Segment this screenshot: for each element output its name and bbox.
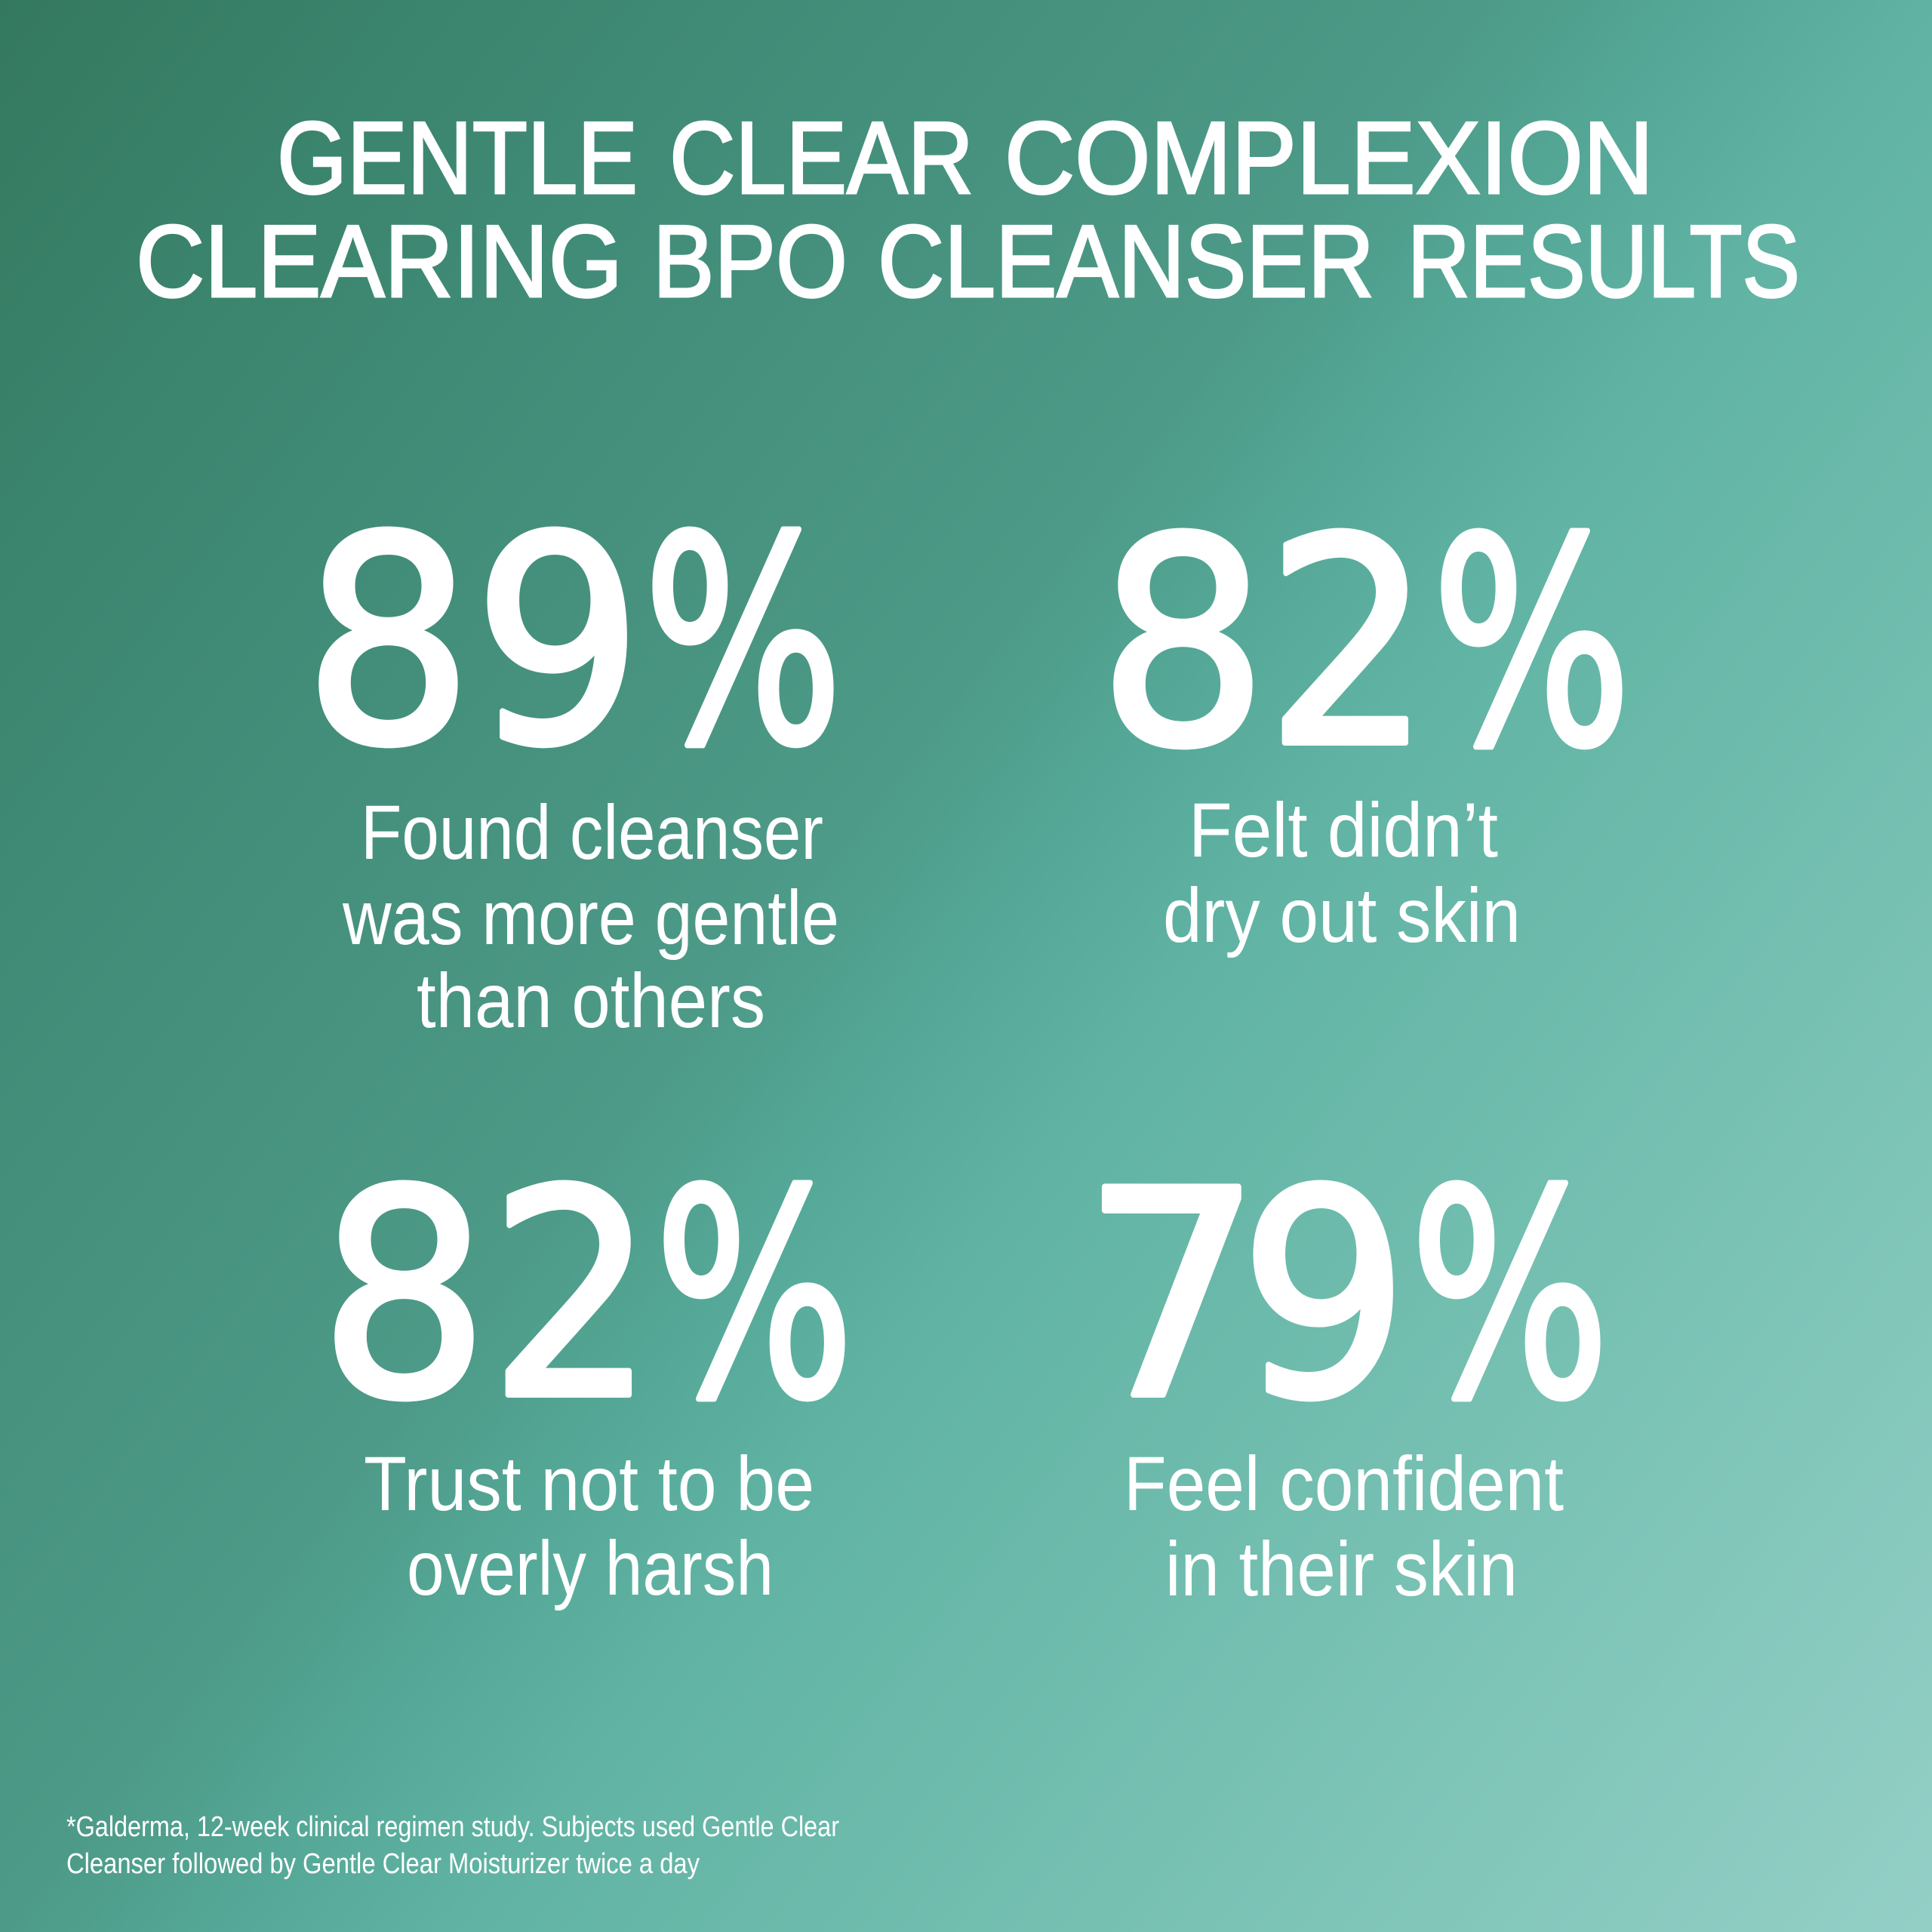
description: feel confident in their skin: Feel confident	[1124, 1441, 1564, 1527]
panel: stat 79%	[1081, 1131, 1610, 1612]
number: 82%: %	[1432, 478, 1632, 811]
number: 79%: 9	[1239, 1131, 1409, 1463]
number: 82%: 8	[1098, 478, 1268, 811]
footnote	[66, 1811, 839, 1880]
title: COMPLEXION	[1004, 100, 1654, 215]
footnote: Cleanser followed by Gentle Clear Moisturizer twice a day	[66, 1848, 700, 1880]
panel: stat 89%	[303, 477, 843, 1044]
panel: stat 82% not overly harsh	[319, 1131, 854, 1611]
description: trust not to be overly harsh	[364, 1441, 814, 1611]
number: 82%: 8	[319, 1131, 489, 1463]
description: feel confident in their skin: in their skin	[1165, 1526, 1518, 1612]
title: CLEARING	[136, 204, 623, 318]
number: 79%: 7	[1081, 1131, 1263, 1463]
number: 89%: 9	[473, 477, 643, 809]
number: 82%: %	[654, 1131, 854, 1463]
description: felt didn't dry out skin: Felt didn’t	[1189, 787, 1498, 873]
title: GENTLE	[277, 100, 638, 215]
description: feel confident in their skin	[1124, 1441, 1564, 1612]
title	[136, 100, 1800, 318]
panel: stat 82% didn't dry out skin	[1098, 478, 1632, 958]
description: found cleanser more gentle: Found cleanser	[361, 789, 823, 875]
description: found cleanser more gentle: was more gentle	[342, 875, 839, 961]
title: CLEANSER	[878, 204, 1374, 318]
title: BPO	[653, 204, 848, 318]
title: CLEAR	[669, 100, 974, 215]
title: RESULTS	[1407, 204, 1800, 318]
number: 79%: %	[1410, 1131, 1610, 1463]
description: felt didn't dry out skin	[1163, 787, 1521, 958]
number: 82%: 2	[489, 1131, 655, 1463]
description: trust not to be overly harsh: overly harsh	[407, 1525, 774, 1611]
number: 89%: %	[643, 477, 843, 809]
description: found cleanser more gentle	[342, 789, 839, 1044]
description: felt didn't dry out skin: dry out skin	[1163, 872, 1521, 958]
description: found cleanser more gentle: than others	[417, 958, 765, 1044]
number: 82%: 2	[1266, 478, 1432, 811]
description: trust not to be overly harsh: Trust not to be	[364, 1441, 814, 1527]
number: 89%: 8	[303, 477, 473, 809]
footnote: *Galderma, 12-week clinical regimen study. Subjects used Gentle Clear	[66, 1811, 839, 1843]
